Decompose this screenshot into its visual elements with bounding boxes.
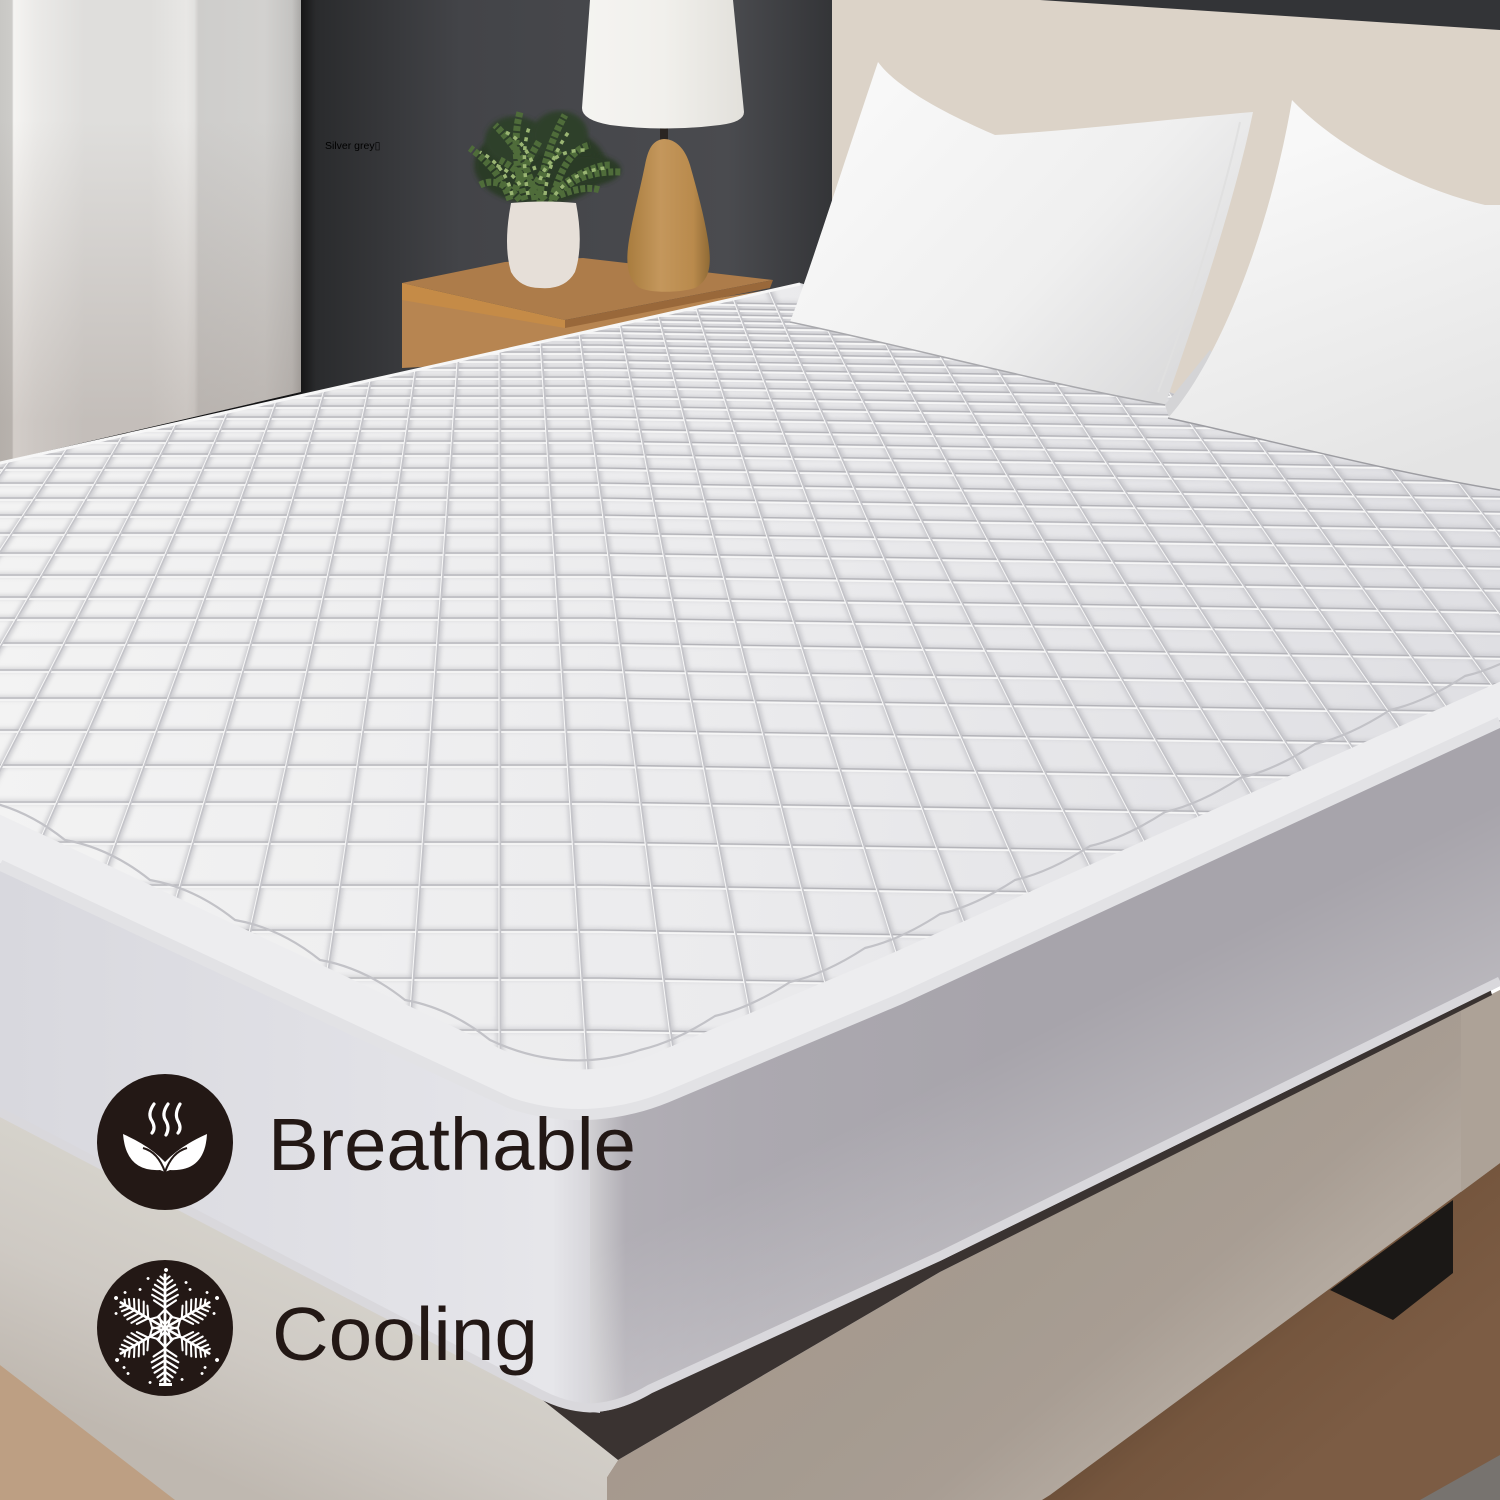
bed leg xyxy=(1330,1200,1453,1320)
label: Breathable xyxy=(268,1103,636,1186)
gap beneath mattress xyxy=(540,988,1492,1460)
mattress right side xyxy=(0,720,1500,1412)
edge piping xyxy=(0,722,1500,1115)
plant xyxy=(470,111,622,288)
pot xyxy=(507,202,580,288)
floor lower left xyxy=(0,1360,180,1500)
quilted mattress top xyxy=(0,280,1500,1120)
lamp xyxy=(582,0,744,292)
floor xyxy=(1020,1150,1500,1500)
pillow left xyxy=(790,62,1253,405)
feature: Breathable xyxy=(97,1074,636,1210)
lower piping xyxy=(0,981,1500,1408)
surface xyxy=(0,283,1500,1115)
curtains xyxy=(0,0,301,462)
border band around quilting xyxy=(0,642,1500,1115)
right base rail xyxy=(607,990,1500,1500)
icon: leaves with steam xyxy=(97,1074,233,1210)
foliage xyxy=(470,111,622,205)
lamp base xyxy=(627,139,710,292)
wall xyxy=(0,0,1500,520)
caption: Silver grey: Silver grey▯ xyxy=(325,140,381,152)
headboard xyxy=(832,0,1500,560)
label: Cooling xyxy=(272,1292,538,1376)
pillow right xyxy=(1168,100,1500,490)
nightstand xyxy=(402,258,800,368)
lamp neck xyxy=(660,126,668,142)
quilting seams xyxy=(0,280,1500,1120)
lamp shade xyxy=(582,0,744,128)
pillow gap sheet xyxy=(1165,350,1240,420)
icon: snowflake xyxy=(97,1260,233,1396)
feature: Cooling xyxy=(97,1260,538,1396)
mattress left side xyxy=(0,863,600,1413)
scalloped stitching xyxy=(0,642,1500,1060)
rail end section xyxy=(1461,990,1500,1192)
rug corner xyxy=(1420,1455,1500,1500)
left base rail xyxy=(0,1115,618,1500)
